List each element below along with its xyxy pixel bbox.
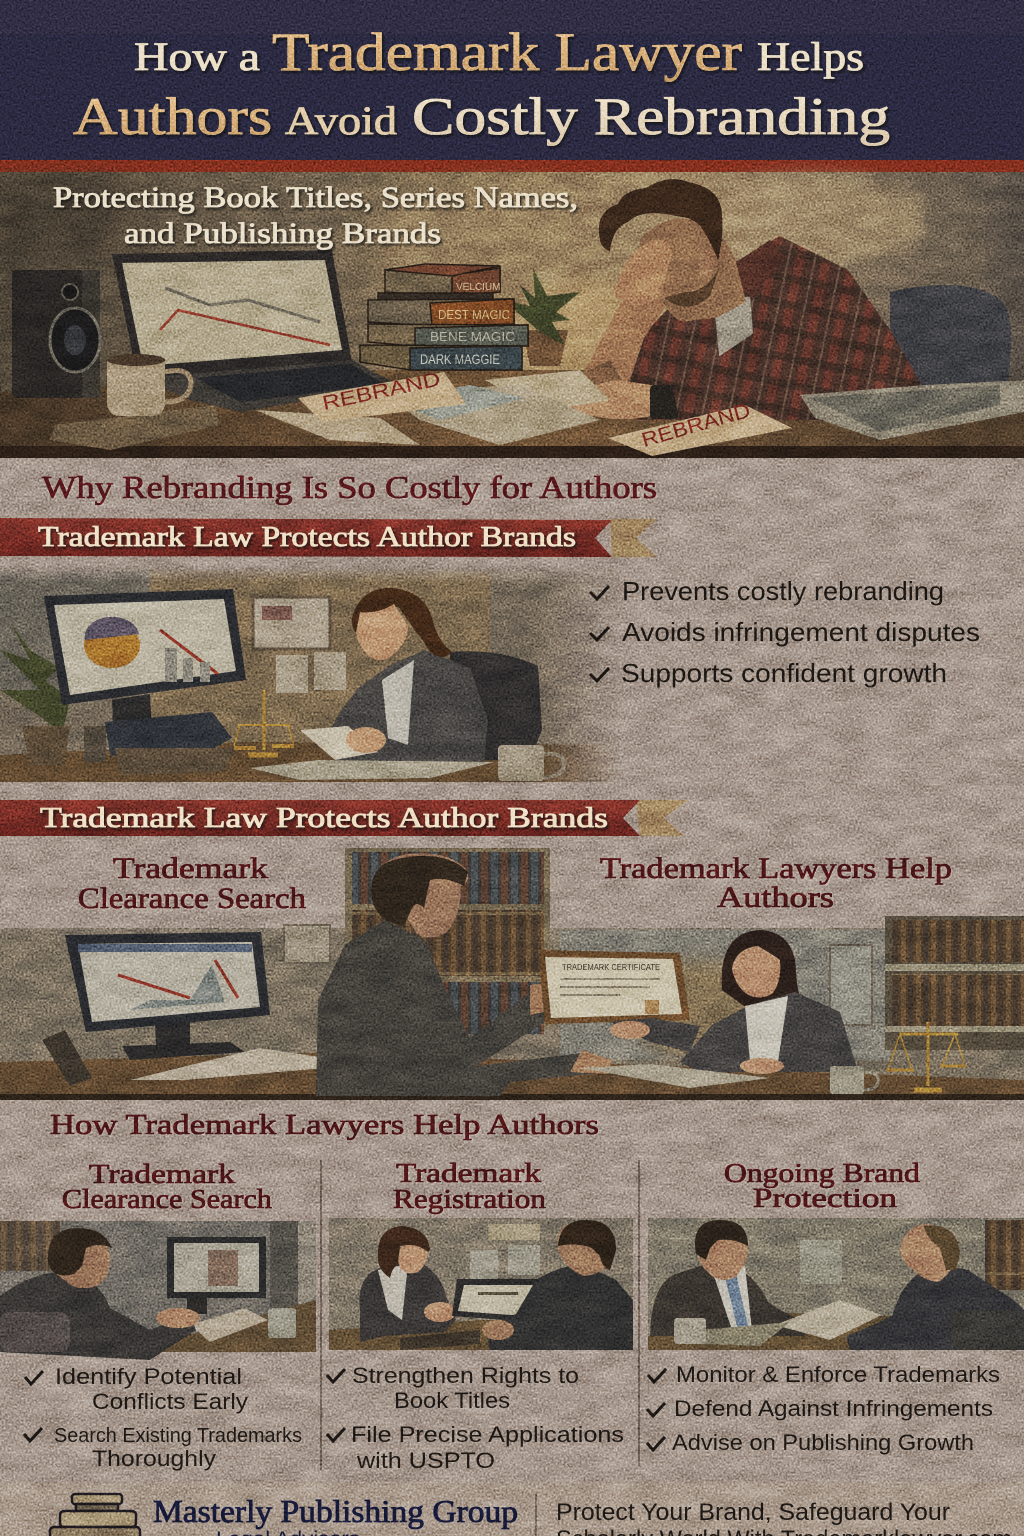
hero subtitle: Protecting Book Titles, Series Names, [53,181,578,214]
bullets: brand protection [647,1362,1000,1455]
mug [498,745,564,781]
hero subtitle: and Publishing Brands [124,217,441,250]
title line 2 [73,88,890,146]
column heading 2: Trademark [396,1158,542,1188]
label: lawyers help: Trademark Lawyers Help [600,852,952,885]
column heading 1 [62,1159,273,1214]
book 3: BENE MAGIC [430,329,515,344]
panel illustration: clearance search [0,1221,316,1360]
man at computer [0,1228,200,1360]
hero illustration: frustrated author at desk [0,172,1024,458]
monitor [42,932,325,1086]
label: lawyers help [600,852,952,914]
monitor [44,589,246,775]
title [73,22,890,146]
ribbon 2 [0,800,688,836]
bullet: search existing [54,1425,302,1471]
center bookshelf [345,848,550,1034]
bullet: file applications: File Precise Applications [351,1422,624,1447]
hair [599,179,722,260]
header band [0,0,1024,172]
title line 1: Helps [757,34,864,79]
panel illustration: brand protection [648,1218,1024,1350]
label: clearance search [78,852,306,915]
speaker [12,270,100,398]
section heading: how lawyers help: How Trademark Lawyers Help Authors [50,1109,599,1141]
bullet: file applications: with USPTO [356,1448,495,1473]
rebrand note 1: REBRAND [320,368,442,415]
forearm [582,276,672,392]
brass scale [886,1022,966,1090]
man [482,1220,633,1350]
book 3 [368,324,528,346]
book 1: VELCIUM [456,282,500,293]
face and neck [640,219,746,321]
column heading 1: Trademark [89,1159,236,1189]
scene: lawyer at desk with chart [0,560,625,785]
title line 2: Avoid [285,98,397,143]
rebrand note 2 [608,400,792,456]
stack of books [360,264,528,370]
right bookcase [885,916,1024,1050]
icon: book stack logo [50,1494,140,1536]
bullet: strengthen rights: Book Titles [394,1388,510,1413]
title line 1: Trademark Lawyer [272,22,742,82]
bullet: file applications [351,1422,624,1473]
book 4: DARK MAGGIE [420,351,500,367]
desk papers [580,1064,770,1088]
desk [0,1052,1024,1100]
checklist: benefits [590,576,980,688]
red rule [0,160,1024,172]
scene: lawyers and certificate [0,848,1024,1100]
hand on forehead [614,240,672,305]
footer divider [535,1494,537,1536]
bullets: registration [327,1363,624,1473]
rebrand note 2: REBRAND [639,400,753,452]
title line 1 [134,22,864,82]
bullet: identify conflicts [55,1364,248,1414]
bullet: strengthen rights [352,1363,579,1413]
book 1 [385,264,500,296]
bullet: search existing: Search Existing Trademarks [54,1425,302,1447]
bullets: clearance search [24,1364,302,1471]
lawyer figure [300,588,542,765]
desk [0,370,1024,458]
call to action [556,1499,1012,1536]
ribbon 2: Trademark Law Protects Author Brands [40,802,608,834]
column heading 2 [393,1158,547,1214]
mug [830,1066,878,1094]
panel illustration: registration [329,1218,633,1350]
title line 1: How a [134,34,260,79]
certificate: TRADEMARK CERTIFICATE [562,963,660,972]
book 4 [360,345,522,370]
call to action: Protect Your Brand, Safeguard Your [556,1499,950,1526]
tablet [452,1279,544,1322]
hero subtitle [53,181,578,250]
hand on desk [556,380,658,419]
column dividers [321,1160,639,1470]
author figure [556,179,926,420]
pencil cup [84,726,106,762]
ribbon 1 [0,518,657,557]
title line 2: Authors [73,88,272,146]
fade into parchment [540,560,625,785]
column heading 1: Clearance Search [62,1184,273,1214]
section heading: why rebranding: Why Rebranding Is So Costly for Authors [42,469,657,505]
bullet: identify conflicts: Conflicts Early [92,1389,248,1414]
column heading 3: Protection [753,1183,898,1213]
desk papers [250,760,495,780]
label: clearance search: Trademark [113,852,268,885]
bullet: defend: Defend Against Infringements [674,1396,993,1421]
office chair [890,285,1011,406]
scene labels [78,852,952,915]
plant [503,268,580,366]
smiling man [650,1220,808,1340]
mug [268,1308,296,1338]
check item 2: Avoids infringement disputes [622,617,980,647]
brass scale [234,690,294,755]
bullet: strengthen rights: Strengthen Rights to [352,1363,579,1388]
publisher name: Masterly Publishing Group [153,1493,518,1529]
desk [0,742,620,782]
check item 1: Prevents costly rebranding [622,576,944,606]
column heading 3 [724,1158,921,1213]
female lawyer [610,930,858,1074]
label: lawyers help: Authors [717,881,834,914]
laptop [112,250,398,412]
bullet: advise: Advise on Publishing Growth [672,1430,974,1455]
certificate [538,950,690,1024]
seated man [846,1224,1024,1350]
coffee mug [50,354,220,450]
column heading 3: Ongoing Brand [724,1158,921,1188]
bullet: search existing: Thoroughly [92,1446,216,1471]
bullet: monitor: Monitor & Enforce Trademarks [676,1362,1000,1387]
paper stacks [255,370,1024,445]
column heading 2: Registration [393,1184,547,1214]
title line 2: Costly Rebranding [412,88,890,146]
book 2: DEST MAGIC [438,307,510,322]
check item 3: Supports confident growth [621,658,947,688]
woman [359,1226,456,1342]
bullet: identify conflicts: Identify Potential [55,1364,242,1389]
rebrand note 1 [298,368,466,422]
book 2 [368,299,514,326]
wall frames [253,597,346,693]
wall frames [284,925,330,963]
monitor [167,1237,268,1342]
papers and mug [674,1300,882,1346]
plant [0,622,70,765]
male lawyer from behind [316,853,612,1096]
label: clearance search: Clearance Search [78,882,306,915]
footer [0,1482,1024,1536]
ribbon 1: Trademark Law Protects Author Brands [38,521,576,553]
